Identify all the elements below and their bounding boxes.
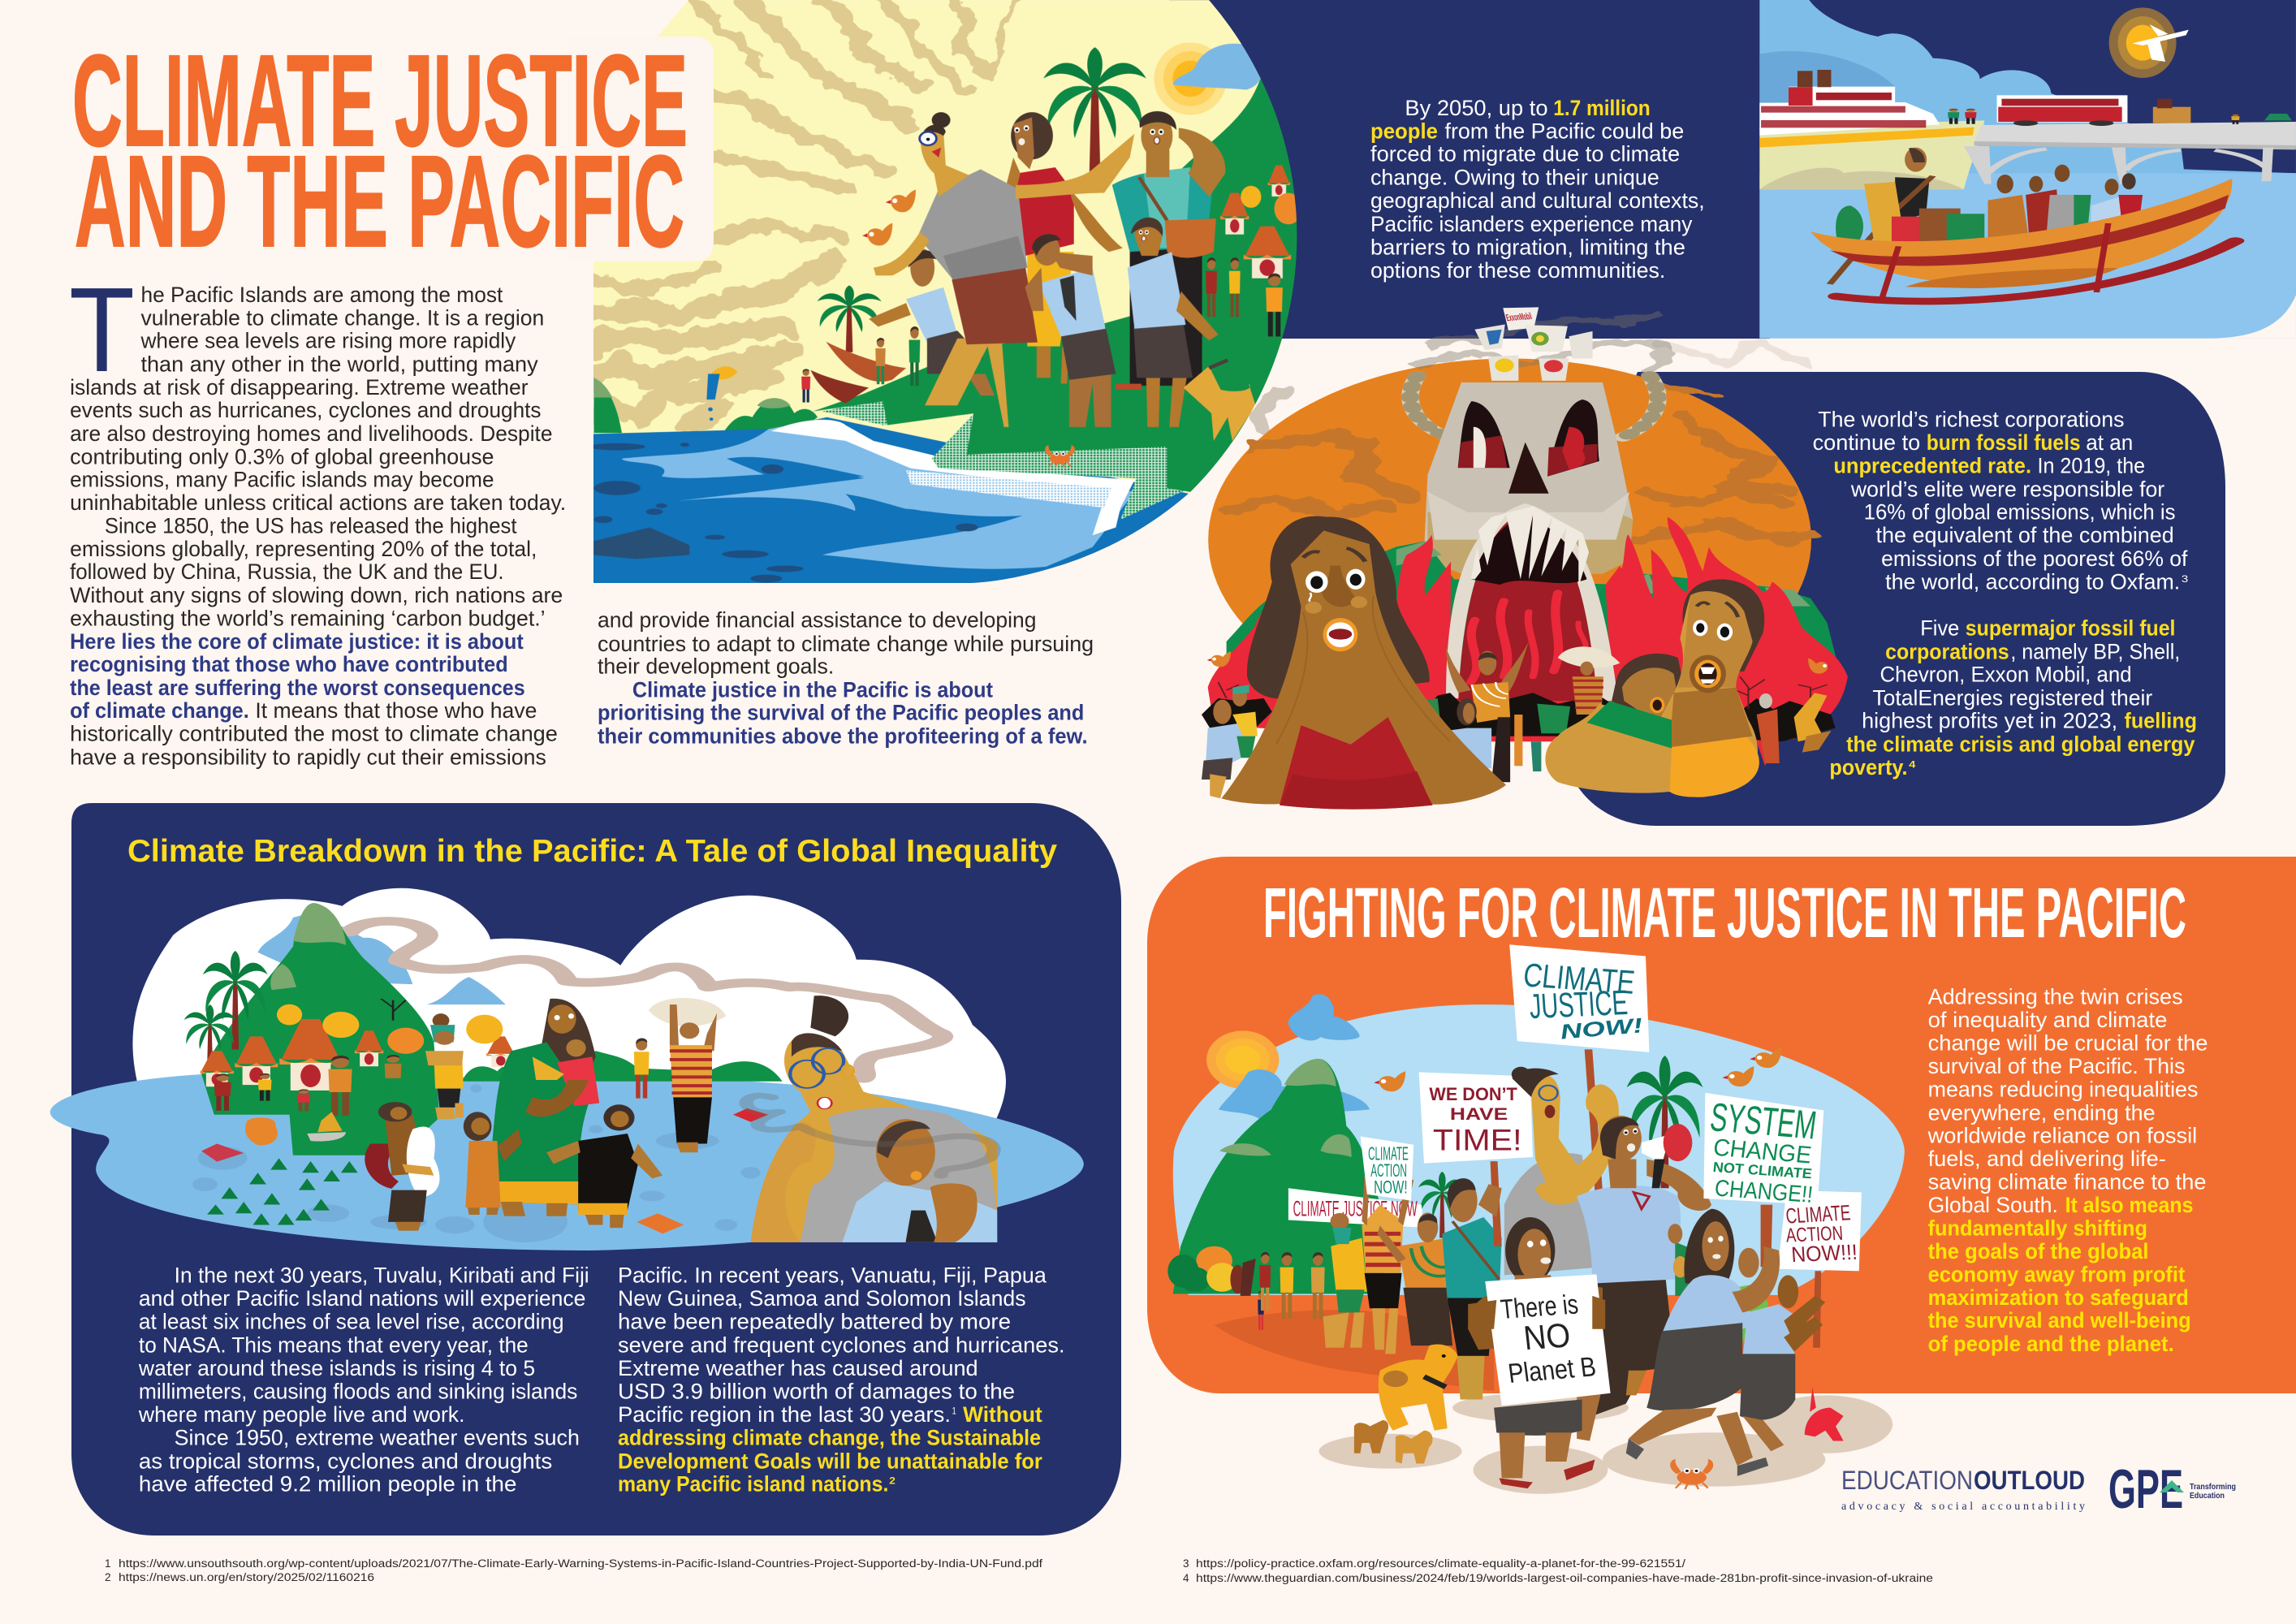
footnotes left: 2 <box>105 1571 111 1583</box>
text: forced to migrate due to climate <box>1370 142 1680 166</box>
person far in red trousers <box>634 1039 650 1099</box>
crab <box>1045 445 1075 467</box>
green island <box>814 316 1277 492</box>
closing text: It also means <box>2065 1193 2193 1217</box>
intro text column 1: events such as hurricanes, cyclones and droughts <box>70 398 542 422</box>
text: have affected 9.2 million people in the <box>139 1471 516 1496</box>
illustration: protest march <box>1167 944 1905 1494</box>
sign: climate action now small <box>1361 1136 1413 1201</box>
dog and pups <box>1354 1345 1457 1464</box>
kid with no planet B sign <box>1468 1217 1611 1488</box>
corporations text: at an <box>2086 430 2133 455</box>
intro text column 2: and provide financial assistance to developing <box>598 607 1036 633</box>
corporations text: corporations <box>1885 639 2009 663</box>
green hills <box>1227 542 1840 676</box>
climate breakdown text column 1 <box>138 1263 589 1496</box>
banner: climate justice <box>1288 1188 1424 1228</box>
footnotes right: https://policy-practice.oxfam.org/resources/climate-equality-a-planet-for-the-99-621551/ <box>1196 1557 1685 1570</box>
panel: migration navy band <box>1169 0 1770 339</box>
cream ground shadows <box>1319 1393 1892 1494</box>
sign: we don't have time <box>1419 1072 1533 1164</box>
illustration: protest march: CLIMATE JUSTICE NOW <box>1293 1197 1418 1221</box>
central woman with megaphone <box>1577 1116 1711 1440</box>
girl in blue shirt <box>1128 218 1219 427</box>
sea rocks and debris <box>589 443 978 582</box>
intro text column 1: the least are suffering the worst consequences <box>70 676 525 700</box>
villagers <box>1206 257 1283 336</box>
large crying woman <box>1221 516 1506 810</box>
man with teal shirt and bag <box>1112 111 1225 390</box>
man in yellow carrying child <box>1323 1213 1367 1348</box>
text: change. Owing to their unique <box>1370 166 1659 190</box>
footnotes left <box>105 1557 1042 1583</box>
illustration: boat, ship and bridge migration scene <box>1759 0 2296 339</box>
water <box>50 1073 1084 1250</box>
silhouette crowd <box>1202 693 1836 741</box>
intro text column 1: uninhabitable unless critical actions are taken today. <box>70 490 566 515</box>
footnotes right <box>1183 1557 1933 1584</box>
illustration: skull monster, fossil-fuel scene upper part <box>1208 307 1811 721</box>
pig and bowl <box>245 1112 346 1146</box>
intro text column 1: than any other in the world, putting many <box>140 352 538 376</box>
closing text: the goals of the global <box>1928 1239 2149 1263</box>
text: as tropical storms, cyclones and droughts <box>139 1449 552 1473</box>
text: Pacific islanders experience many <box>1370 212 1692 236</box>
island trees <box>277 999 503 1054</box>
far tree line <box>462 1051 783 1082</box>
text: Extreme weather has caused around <box>618 1356 978 1380</box>
woman in stripes arms up <box>1362 1176 1413 1354</box>
girl in blue at right edge <box>1740 1275 1825 1451</box>
sign: system change: CHANGE <box>1711 1134 1813 1169</box>
side crowd right <box>1668 1224 1768 1345</box>
text: millimeters, causing floods and sinking islands <box>139 1379 577 1403</box>
title card <box>568 37 714 261</box>
intro text column 1: historically contributed the most to climate change <box>70 722 558 746</box>
intro text column 1: recognising that those who have contributed <box>70 652 508 676</box>
text: and other Pacific Island nations will experience <box>139 1286 585 1311</box>
intro text column 1: It means that those who have <box>255 698 537 723</box>
orange ground shade <box>1215 1310 1494 1391</box>
logo: GPE: GPE <box>2108 1458 2183 1520</box>
intro text column 1: are also destroying homes and livelihoods. Despite <box>70 421 553 446</box>
kid with no planet B sign: Planet B <box>1506 1352 1598 1389</box>
left small family <box>1202 685 1258 798</box>
man in teal with stick <box>1442 1161 1502 1399</box>
rice seedlings <box>207 1158 358 1225</box>
intro text column 1: of climate change. <box>70 698 249 723</box>
cargo and passengers <box>1836 165 2143 246</box>
birds <box>862 190 916 245</box>
closing text <box>1927 985 2208 1356</box>
sign: climate justice now: CLIMATE <box>1521 956 1637 1001</box>
inside of mouth <box>1458 512 1597 701</box>
intro text column 1: have a responsibility to rapidly cut their emissions <box>70 745 546 769</box>
sign: climate action now: CLIMATE <box>1785 1201 1852 1229</box>
skull head <box>1424 382 1633 574</box>
text: fuelling <box>2124 708 2197 732</box>
fire in mouth <box>1471 593 1586 682</box>
girl in orange dress <box>464 1112 522 1215</box>
intro text column 1: emissions, many Pacific islands may become <box>70 468 494 492</box>
intro text column 1: islands at risk of disappearing. Extreme weather <box>70 375 529 400</box>
trees at foot of mountain <box>1167 1246 1245 1294</box>
palm trees <box>184 951 268 1069</box>
closing text: fuels, and delivering life- <box>1928 1147 2166 1171</box>
corporations text: continue to <box>1813 430 1920 455</box>
climate breakdown text column 2: Pacific region in the last 30 years. <box>618 1402 951 1427</box>
clouds behind mountain <box>258 912 506 1004</box>
footnotes right: 4 <box>1183 1572 1189 1584</box>
small girl and others in the crowd <box>1417 693 1832 771</box>
intro text column 1 <box>70 283 566 769</box>
grey smoke from chimneys <box>1421 314 1664 372</box>
corporations text: Five <box>1920 615 1959 640</box>
crab <box>1670 1459 1713 1489</box>
migration text <box>1370 96 1705 283</box>
migration text: By 2050, up to <box>1405 96 1548 120</box>
title: CLIMATE JUSTICE <box>72 28 688 173</box>
water ripples <box>192 1085 761 1242</box>
logo: Education Out Loud <box>1841 1466 2085 1513</box>
man carrying sack <box>1558 646 1620 715</box>
floating books <box>201 1108 768 1233</box>
man with child on shoulders <box>425 1013 464 1119</box>
text: water around these islands is rising 4 to 5 <box>138 1356 535 1380</box>
cloud <box>1172 44 1261 90</box>
plane <box>2132 24 2189 62</box>
drifting smoke around the skull <box>1242 341 1810 528</box>
sign: we don't have time: WE DON’T <box>1429 1085 1517 1104</box>
intro text column 1: followed by China, Russia, the UK and the EU. <box>70 559 504 584</box>
closing text: Global South. <box>1928 1193 2058 1217</box>
sign: climate action now: NOW!!! <box>1790 1241 1858 1267</box>
closing text: fundamentally shifting <box>1928 1216 2147 1240</box>
footnotes right: https://www.theguardian.com/business/2024/feb/19/worlds-largest-oil-companies-have-made-281bn-profit-since-invasion-of-ukraine <box>1196 1572 1933 1584</box>
bus <box>1997 95 2127 126</box>
intro text column 2 <box>598 607 1094 748</box>
blue-white textured foam edge <box>906 470 1111 508</box>
closing text: worldwide reliance on fossil <box>1927 1124 2197 1147</box>
text: from the Pacific could be <box>1444 119 1684 144</box>
intro text column 1: contributing only 0.3% of global greenhouse <box>70 444 494 469</box>
boats <box>810 342 906 404</box>
dead trees <box>1218 676 1827 709</box>
closing text: survival of the Pacific. This <box>1928 1054 2185 1078</box>
closing text: maximization to safeguard <box>1928 1285 2189 1310</box>
title: AND THE PACIFIC <box>75 128 684 274</box>
panel: fighting for climate justice <box>1147 857 2296 1393</box>
closing text: Addressing the twin crises <box>1928 985 2183 1009</box>
sign: we don't have time: TIME! <box>1433 1123 1522 1156</box>
closing text: everywhere, ending the <box>1928 1100 2156 1125</box>
rower <box>1830 148 1933 284</box>
outrigger <box>1836 223 2235 301</box>
text: geographical and cultural contexts, <box>1370 188 1705 213</box>
closing text: of inequality and climate <box>1928 1008 2167 1032</box>
orange planet <box>1208 359 1811 721</box>
white foam <box>771 420 1134 535</box>
big woman with glasses and cigarette smoke <box>751 996 997 1242</box>
woman with arms raised <box>1446 641 1529 782</box>
corporations text: poverty. <box>1829 755 1908 780</box>
illustration: flooded island and fossil elites <box>50 888 1084 1250</box>
text: Without <box>963 1402 1042 1427</box>
darker smoke on planet <box>1226 382 1811 540</box>
intro text column 1: vulnerable to climate change. It is a region <box>140 306 544 330</box>
heading: climate breakdown: Climate Breakdown in the Pacific: A Tale of Global Inequality <box>127 834 1057 869</box>
palm tree big <box>1043 47 1146 177</box>
sky behind clouds <box>1809 0 2296 124</box>
kid with no planet B sign: There is <box>1499 1289 1580 1325</box>
birds <box>1207 651 1832 674</box>
small figures at shore <box>801 326 920 403</box>
sign: system change <box>1703 1093 1823 1267</box>
fish leaping <box>706 366 737 421</box>
drop cap: T <box>69 263 135 397</box>
ship <box>1759 70 1984 189</box>
man with tie covering face <box>1025 234 1116 427</box>
intro text column 2: Climate justice in the Pacific is about <box>632 677 993 702</box>
illustration: protest march: CLIMATE <box>1368 1142 1409 1164</box>
palms <box>1418 1056 1703 1237</box>
climate breakdown text column 2: many Pacific island nations. <box>618 1471 888 1496</box>
sun <box>1154 42 1227 115</box>
back woman in red and yellow <box>1004 112 1123 384</box>
kid on left pointing <box>869 248 995 395</box>
footnotes left: 1 <box>105 1557 111 1570</box>
intro text column 1: emissions globally, representing 20% of the total, <box>70 537 537 561</box>
teeth <box>1478 506 1589 587</box>
woman in grey with outstretched arm <box>874 112 1134 427</box>
logo: GPE: Education <box>2190 1492 2225 1501</box>
logo: Education Out Loud: advocacy & social accountability <box>1841 1501 2085 1513</box>
text: barriers to migration, limiting the <box>1370 235 1685 260</box>
car <box>2153 99 2292 123</box>
flames <box>1208 517 1848 766</box>
island huts <box>201 1019 515 1091</box>
text: Since 1950, extreme weather events such <box>175 1425 580 1449</box>
closing text: means reducing inequalities <box>1928 1078 2198 1101</box>
text: severe and frequent cyclones and hurricanes. <box>618 1332 1065 1357</box>
woman with tyre and dog <box>365 1102 439 1231</box>
man holding another person <box>1545 579 1764 797</box>
text: to NASA. This means that every year, the <box>139 1332 529 1357</box>
grey smoke over figures <box>746 1095 994 1176</box>
birds <box>1374 1047 1781 1091</box>
pale blue sky <box>1173 1004 1905 1295</box>
bridge <box>1964 122 2296 184</box>
illustration: fire, crowd and frightened people, lower part <box>1202 503 1848 810</box>
sea <box>585 417 1200 590</box>
footnotes left: https://www.unsouthsouth.org/wp-content/uploads/2021/07/The-Climate-Early-Warning-Systems-in-Pacific-Island-Countries-Project-Supported-by-India-UN-Fund.pdf <box>119 1557 1042 1570</box>
corporations text: 4 <box>1909 759 1916 770</box>
sign: system change: NOT CLIMATE <box>1712 1160 1813 1182</box>
text: Development Goals will be unattainable for <box>618 1449 1042 1473</box>
text: Pacific. In recent years, Vanuatu, Fiji, Papua <box>618 1263 1047 1287</box>
closing text: of people and the planet. <box>1928 1332 2174 1356</box>
cat <box>1805 1387 1844 1440</box>
panel: corporations navy <box>1569 372 2225 826</box>
flags: ExxonMobil <box>1504 310 1533 323</box>
checker shore band <box>822 398 1185 520</box>
text: have been repeatedly battered by more <box>618 1309 1011 1333</box>
smoke bands in sky <box>593 0 1018 425</box>
white cloud sky <box>132 888 1006 1144</box>
corporations text: In 2019, the <box>2038 453 2145 477</box>
sign: climate action now small: NOW! <box>1374 1177 1408 1198</box>
tall woman with glasses holding pole <box>1504 1049 1619 1275</box>
kid with no planet B sign: NO <box>1521 1316 1573 1358</box>
sign: climate justice now: NOW! <box>1559 1014 1645 1044</box>
logo: Education Out Loud: EDUCATION <box>1841 1466 1973 1495</box>
closing text: change will be crucial for the <box>1928 1031 2208 1055</box>
text: In the next 30 years, Tuvalu, Kiribati and Fiji <box>175 1263 589 1287</box>
migration text: people <box>1370 119 1438 144</box>
corporations text: burn fossil fuels <box>1927 430 2081 455</box>
woman in green with child <box>483 999 599 1216</box>
footnotes left: https://news.un.org/en/story/2025/02/1160216 <box>119 1571 374 1583</box>
man with sack, striped shirt <box>649 998 726 1152</box>
intro text column 1: Here lies the core of climate justice: it is about <box>70 629 524 654</box>
sign: climate justice now <box>1509 944 1649 1052</box>
intro text column 1: exhausting the world’s remaining ‘carbon budget.’ <box>70 606 546 630</box>
corporations text: 3 <box>2182 573 2188 585</box>
woman with necklace <box>1378 1212 1452 1345</box>
migration text: 1.7 million <box>1553 96 1651 120</box>
horns <box>1410 376 1658 437</box>
mountains <box>1173 1059 1385 1294</box>
title <box>72 28 688 274</box>
intro text column 2: their communities above the profiteering of a few. <box>598 723 1088 748</box>
text: USD 3.9 billion worth of damages to the <box>618 1379 1015 1403</box>
distant hills and green right slope <box>593 78 1297 434</box>
intro text column 2: their development goals. <box>598 654 834 679</box>
flags <box>1474 307 1593 381</box>
sign: climate action now <box>1778 1190 1862 1348</box>
villagers <box>214 1055 401 1116</box>
sign: climate action now: ACTION <box>1785 1222 1844 1246</box>
woman with long hair marching <box>1626 1209 1780 1476</box>
climate breakdown text column 2: 2 <box>889 1475 896 1486</box>
climate breakdown text column 2 <box>618 1263 1065 1496</box>
closing text: economy away from profit <box>1928 1262 2186 1286</box>
girl in black dress <box>546 1104 662 1228</box>
illustration: people fleeing rising sea, circular scene <box>585 0 1330 598</box>
sign: system change: SYSTEM <box>1707 1095 1819 1147</box>
sign: system change: CHANGE!! <box>1713 1175 1815 1207</box>
closing text: saving climate finance to the <box>1928 1170 2206 1194</box>
corporations text <box>1813 407 2197 780</box>
smoke trail <box>349 921 943 1078</box>
logo: Education Out Loud: OUTLOUD <box>1974 1466 2085 1495</box>
sign: climate justice now: JUSTICE <box>1528 983 1629 1026</box>
sun <box>1206 1030 1279 1089</box>
green mountain island <box>201 903 439 1155</box>
hull <box>1810 179 2232 288</box>
mouth pillar arch <box>1446 503 1618 701</box>
clouds <box>1219 994 1370 1120</box>
intro text column 2: prioritising the survival of the Pacific peoples and <box>598 700 1084 725</box>
panel: climate breakdown <box>71 803 1121 1535</box>
text: at least six inches of sea level rise, according <box>139 1309 564 1333</box>
intro text column 1: Since 1850, the US has released the highest <box>105 513 517 538</box>
goat <box>1184 361 1256 441</box>
intro text column 1: where sea levels are rising more rapidly <box>140 329 516 353</box>
village huts <box>1220 166 1302 279</box>
corporations text: unprecedented rate. <box>1833 453 2031 477</box>
text: New Guinea, Samoa and Solomon Islands <box>618 1286 1026 1311</box>
intro text column 1: he Pacific Islands are among the most <box>140 283 503 307</box>
logo: GPE: Transforming <box>2190 1483 2236 1492</box>
illustration: protest march: ACTION <box>1370 1161 1407 1181</box>
sign: we don't have time: HAVE <box>1450 1105 1508 1124</box>
text: options for these communities. <box>1370 258 1665 283</box>
sun <box>2109 7 2177 78</box>
palm tree small <box>817 285 882 352</box>
text: addressing climate change, the Sustainable <box>618 1425 1041 1449</box>
back crowd <box>1241 1252 1325 1330</box>
climate breakdown text column 2: 1 <box>952 1406 956 1416</box>
footnotes right: 3 <box>1183 1557 1189 1570</box>
closing text: the survival and well-being <box>1928 1308 2191 1332</box>
man in shirt with tie blowing smoke <box>842 1119 997 1242</box>
intro text column 2: countries to adapt to climate change while pursuing <box>598 631 1094 656</box>
climate breakdown text column 1: where many people live and work. <box>138 1402 464 1427</box>
intro text column 1: Without any signs of slowing down, rich nations are <box>70 583 563 607</box>
